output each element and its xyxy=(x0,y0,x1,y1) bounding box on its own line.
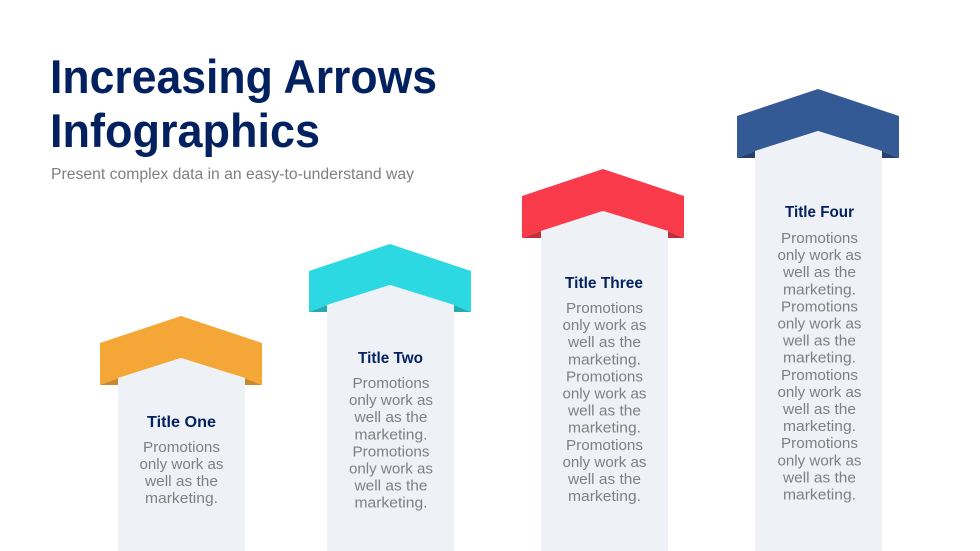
body text: Promotions xyxy=(781,298,858,315)
body text: well as the xyxy=(782,333,856,350)
body text: only work as xyxy=(562,386,646,402)
column body xyxy=(755,131,882,551)
title: Infographics xyxy=(50,104,320,157)
arrow column: Title One xyxy=(100,316,262,551)
body text: marketing. xyxy=(568,351,641,368)
heading: Title Two: Title Two xyxy=(358,350,423,367)
arrow head: red xyxy=(522,169,684,238)
body text: marketing. xyxy=(568,488,641,505)
body text: marketing. xyxy=(783,486,856,504)
body text: marketing. xyxy=(354,495,428,512)
arrow column: Title Three xyxy=(522,169,684,551)
body text: only work as xyxy=(778,247,862,264)
body text: well as the xyxy=(567,403,641,420)
body text: only work as xyxy=(140,456,224,473)
body text: Promotions xyxy=(781,435,858,452)
body text xyxy=(778,230,862,504)
body text: well as the xyxy=(353,478,428,495)
body text: well as the xyxy=(567,471,641,488)
body text: well as the xyxy=(782,469,856,486)
body text xyxy=(562,300,646,505)
body text: well as the xyxy=(567,334,641,351)
body text: Promotions xyxy=(566,300,643,317)
body text: marketing. xyxy=(783,281,856,298)
body text: only work as xyxy=(349,460,433,478)
body text: marketing. xyxy=(783,350,856,367)
body text xyxy=(140,439,224,507)
body text: only work as xyxy=(349,392,433,409)
arrow column: Title Two xyxy=(309,244,471,551)
column body xyxy=(541,211,668,551)
body text: only work as xyxy=(562,317,646,334)
body text: well as the xyxy=(782,264,856,281)
body text: only work as xyxy=(562,454,646,471)
body text: only work as xyxy=(778,384,862,401)
heading: Title One: Title One xyxy=(147,414,216,431)
body text: marketing. xyxy=(354,426,428,443)
arrow head: navy xyxy=(737,89,899,158)
title xyxy=(50,50,437,157)
column body xyxy=(327,285,454,551)
body text: Promotions xyxy=(352,443,430,460)
arrow column: Title Four xyxy=(737,89,899,551)
body text: Promotions xyxy=(781,367,858,384)
body text: marketing. xyxy=(145,490,218,507)
body text: well as the xyxy=(353,409,428,426)
body text: well as the xyxy=(144,473,218,490)
body text: marketing. xyxy=(568,420,641,437)
body text: marketing. xyxy=(783,418,856,435)
column body xyxy=(118,358,245,551)
body text: Promotions xyxy=(781,230,858,247)
body text: Promotions xyxy=(143,439,220,456)
heading: Title Three: Title Three xyxy=(565,275,643,292)
arrow head: teal xyxy=(309,244,471,312)
heading: Title Four: Title Four xyxy=(785,204,854,221)
body text: Promotions xyxy=(566,368,643,385)
body text: only work as xyxy=(778,452,862,469)
body text: Promotions xyxy=(566,437,643,454)
subtitle: Present complex data in an easy-to-understand way xyxy=(51,166,414,183)
body text: Promotions xyxy=(352,375,430,392)
title: Increasing Arrows xyxy=(50,50,437,103)
body text: well as the xyxy=(782,401,856,418)
body text: only work as xyxy=(778,316,862,332)
body text xyxy=(349,375,433,512)
arrow head: orange xyxy=(100,316,262,385)
